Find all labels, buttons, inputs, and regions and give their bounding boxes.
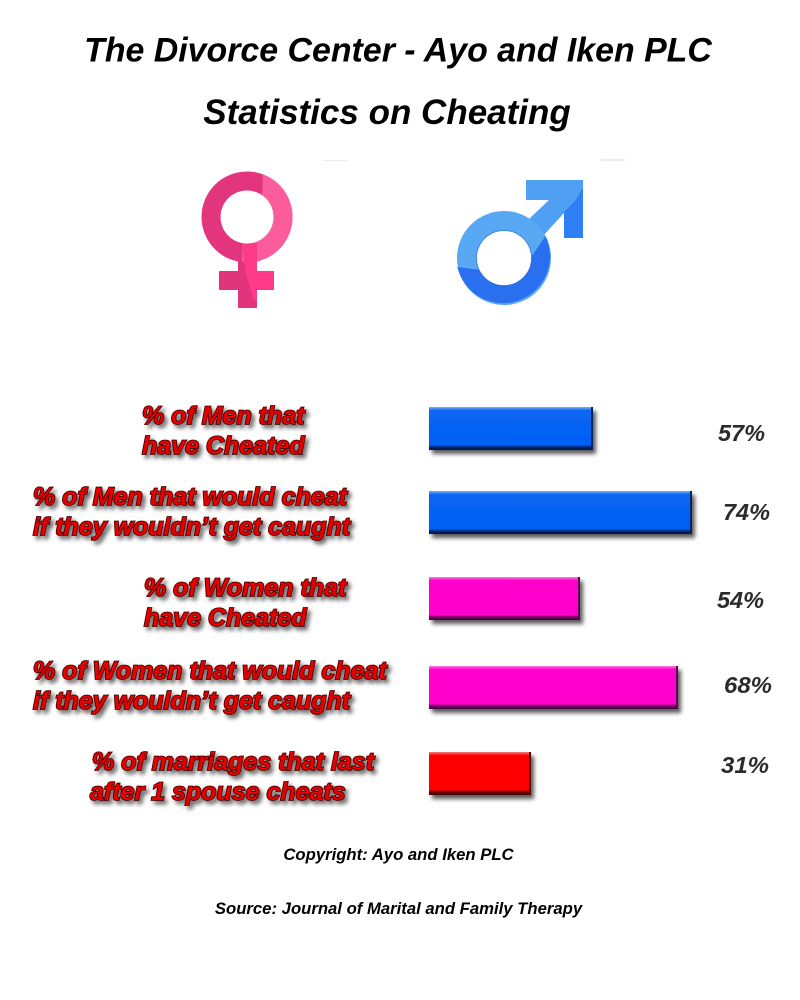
bar label [90,748,376,806]
bar label: have Cheated [144,604,307,632]
title: Statistics on Cheating [203,93,571,132]
bar label: % of Women that would cheat [33,657,388,685]
value: 57% [718,420,765,446]
bar row: women would cheat [33,657,772,715]
value: 54% [717,587,764,613]
bar label [144,574,348,632]
bar row: women cheated [144,574,764,632]
icon: female symbol [202,172,293,308]
bar row: men cheated [142,402,765,460]
bar label [33,483,352,541]
bar label: % of Women that [144,574,348,602]
bar [429,491,692,534]
bar [429,407,593,450]
bar label: % of marriages that last [92,748,376,776]
title [84,32,712,132]
bar label: if they wouldn’t get caught [33,687,352,715]
icon: male symbol [457,180,583,305]
bar label: % of Men that [142,402,306,430]
bar [429,752,531,795]
copyright: Copyright: Ayo and Iken PLC [283,845,515,864]
bar row: men would cheat [33,483,770,541]
bar row: marriages that last [90,748,769,806]
bar [429,577,580,620]
faint marks above icons [323,159,625,161]
bar label [33,657,388,715]
bar label [142,402,306,460]
bar label: have Cheated [142,432,305,460]
bar label: after 1 spouse cheats [90,778,346,806]
bar [429,666,678,709]
bar label: % of Men that would cheat [33,483,349,511]
value: 74% [723,499,770,525]
value: 68% [724,672,772,698]
source: Source: Journal of Marital and Family Therapy [215,899,583,918]
bar label: if they wouldn’t get caught [33,513,352,541]
value: 31% [721,752,769,778]
title: The Divorce Center - Ayo and Iken PLC [84,32,712,70]
